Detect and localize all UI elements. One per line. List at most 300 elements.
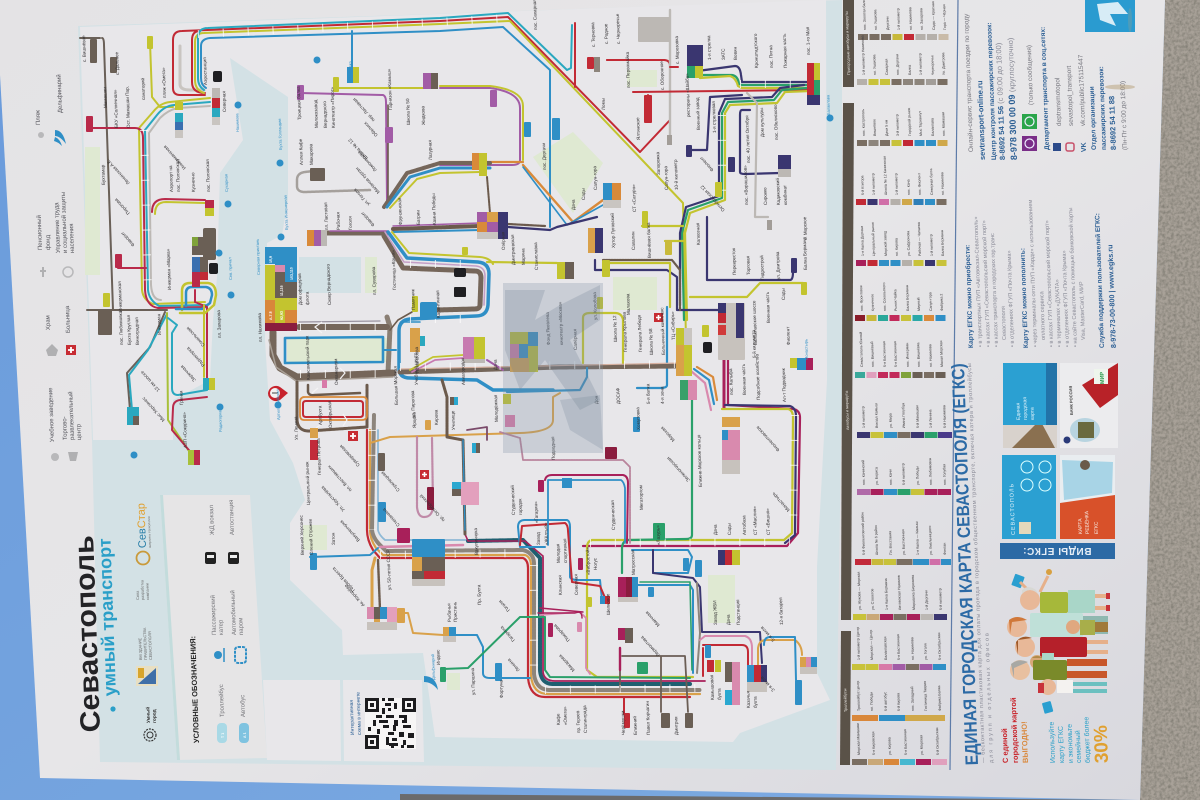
route block: Nakhimov square: 92,93 bbox=[280, 311, 284, 320]
table column 4: Школа № 12 Качинская bbox=[883, 156, 888, 195]
map text: station names south: Завод bbox=[536, 532, 541, 545]
map text: station names east: Дача bbox=[571, 199, 576, 210]
table column 7 bbox=[855, 332, 946, 378]
map text: pier and water names bbox=[217, 60, 831, 680]
legend text: facilities bbox=[35, 74, 83, 442]
how to buy: • в терминалах «ДУКАТА» bbox=[1055, 279, 1063, 347]
table column 4: пос. Фиолент bbox=[917, 173, 922, 195]
legend: bus station: Автостанция bbox=[229, 499, 236, 535]
map text: station names city centre: Станиславка bbox=[533, 242, 539, 270]
table headers bbox=[840, 0, 854, 765]
legend: trolleybus: Т 1 bbox=[221, 733, 225, 738]
how to buy: Карту ЕГКС можно приобрести: bbox=[963, 245, 975, 348]
icon: WhatsApp bbox=[1022, 114, 1037, 129]
map text: station names south: Мегаторгом bbox=[638, 485, 644, 510]
map text: station names south: Матросская bbox=[630, 549, 636, 575]
contacts: пассажирских перевозок: bbox=[1098, 66, 1108, 150]
map text: station names city centre: пл. Суворова bbox=[371, 266, 377, 295]
map text: station names city centre: Артбухта bbox=[317, 405, 323, 425]
map text: station names south: Ул. Хрусталёва bbox=[320, 485, 346, 513]
table column 4: Северная бухта bbox=[929, 168, 934, 195]
route block: Nakhimov square: 10,9 bbox=[269, 256, 273, 263]
map text: station names north side: Кузнечно bbox=[190, 172, 196, 192]
route block: Nakhimov square: 11,116 bbox=[280, 285, 284, 296]
map text: station names east: с. Оборонное bbox=[659, 61, 665, 90]
panel: QR code: Интерактивная bbox=[349, 699, 356, 735]
table column 8: Ивана Голубца bbox=[901, 403, 906, 428]
promo: red: С единой bbox=[1000, 728, 1010, 763]
map text: station names city centre: Генерал Петрова bbox=[316, 438, 322, 475]
card: orange student: РЕБЁНКА bbox=[1083, 510, 1091, 534]
map text: station names south: 5-я балка bbox=[645, 383, 651, 404]
map text: station names south: Фортуна bbox=[498, 679, 504, 698]
table column 5: 1-й километр bbox=[929, 234, 934, 256]
panel: QR code bbox=[343, 680, 424, 762]
map text: station names north side: Малахов курган bbox=[354, 166, 381, 195]
title panel bbox=[68, 495, 267, 760]
map text: station names east: Торговая bbox=[745, 255, 751, 275]
table column 14 bbox=[852, 723, 947, 765]
legend text: facilities: и социальной защиты bbox=[60, 192, 69, 253]
how to buy: • через терминалы сети ПУП «Карди» с использованием bbox=[1028, 199, 1039, 347]
support line: Служба поддержки пользователей ЕГКС: bbox=[1093, 213, 1106, 348]
map text: station names east: Дом культуры bbox=[759, 108, 765, 137]
icon: shopping bbox=[68, 452, 78, 461]
map text: station names city centre: Дмитриевская bbox=[510, 234, 516, 265]
map text: station names south: городок bbox=[517, 498, 523, 515]
map text: station names east: Сапун-гора bbox=[663, 166, 669, 190]
promo: red: ВЫГОДНО! bbox=[1020, 721, 1030, 763]
card: orange student: ЕГКС bbox=[1094, 521, 1100, 534]
map text: station names south: Пристань bbox=[452, 601, 458, 622]
map text: pier and water names: Радиогорка bbox=[217, 410, 223, 432]
map text: station names east: СТ «Сатурн» bbox=[631, 184, 637, 212]
map text: station names east: Военная часть bbox=[765, 291, 771, 323]
contacts: deptransmotopol bbox=[1054, 77, 1063, 126]
legend text: facilities: Больница bbox=[65, 305, 72, 333]
card: blue general bbox=[1003, 363, 1057, 448]
table column 1: Дергачи bbox=[886, 17, 890, 30]
contacts: sevtransport-online.ru bbox=[975, 80, 987, 160]
table column 11: 1-я балка Бермана bbox=[884, 578, 889, 610]
map text: station names city centre: Ломоносова bbox=[414, 346, 420, 373]
map text: station names north side: пл. Ластовая bbox=[323, 202, 329, 230]
card heading: ЕДИНАЯ ГОРОДСКАЯ КАРТА СЕВАСТОПОЛЯ (ЕГКС) bbox=[948, 363, 982, 766]
card: orange student: КАРТА bbox=[1077, 518, 1084, 534]
panel: route tables bbox=[840, 0, 958, 770]
map text: station names south: Верхний Херсонес bbox=[298, 514, 305, 555]
logo: SevStar: СевСтар bbox=[135, 503, 149, 548]
map text: station names city centre: Учебный центр bbox=[412, 352, 419, 385]
table column 10: Школа № 6 район bbox=[874, 525, 879, 555]
legend: bus station bbox=[228, 499, 239, 564]
legend: trolleybus bbox=[217, 684, 227, 743]
logo: department caption bbox=[136, 579, 153, 660]
map text: station names east: Гидрострой bbox=[758, 255, 765, 280]
contacts: 8-978 300 00 09 (круглосуточно) bbox=[1005, 37, 1019, 160]
map text: station names north side: Пирогова bbox=[113, 197, 131, 216]
table column 14: 5-я Бастионная bbox=[903, 729, 908, 755]
legend: car ferry bbox=[229, 590, 246, 663]
table column 5 bbox=[856, 222, 946, 266]
table column 4: 5-й Ктитора bbox=[860, 175, 865, 195]
map text: station names south: пр. Героев bbox=[575, 710, 581, 733]
map text: station names south: Дача bbox=[726, 614, 731, 625]
map text: station names north side: Камни Победы bbox=[431, 193, 437, 225]
map text: station names city centre: Малахова bbox=[625, 293, 631, 315]
map text: station names city centre: Авиагородок bbox=[460, 357, 466, 385]
map text: station names east: Ломы bbox=[601, 98, 606, 110]
table column 8: 5-й Нахимова bbox=[942, 405, 947, 428]
map text: station names north side: Сокольская bbox=[185, 325, 206, 348]
map text: station names south: «Вибростой» bbox=[584, 547, 591, 575]
legend text: facilities: Торгово- bbox=[62, 416, 69, 440]
table column 5: Рабочая — Чапаева bbox=[917, 222, 922, 256]
map base: Artillery bay bbox=[299, 257, 361, 293]
icon: church bbox=[46, 344, 58, 356]
how to buy: • в отделениях ФГУП «Почта Крыма» bbox=[1062, 250, 1071, 347]
table column 11: ул. Жукова — Морская bbox=[857, 572, 862, 610]
how to buy: • в кассах ГУП «Севастопольский морской порт» bbox=[981, 220, 992, 347]
map text: pier and water names: Бухта Инженерная bbox=[283, 195, 289, 230]
table column 14: 5-я Кировская bbox=[871, 731, 876, 755]
table column 13: пл. Победы bbox=[869, 691, 874, 711]
map text: station names south: СТ «Маслин» bbox=[752, 506, 758, 535]
map text: station names east: Кронштадтского bbox=[753, 33, 759, 68]
banner: card types bbox=[1000, 543, 1115, 559]
icon: school bbox=[51, 453, 59, 461]
map base: sea bbox=[78, 0, 842, 770]
legend: trolleybus: Троллейбус bbox=[218, 684, 226, 717]
map text: pier and water names: Бухта Голландия bbox=[277, 118, 283, 150]
table column 5: Балка Бермана bbox=[940, 230, 945, 256]
map text: station names east: 1-я стрелковая bbox=[711, 101, 717, 133]
map base: parks bbox=[85, 70, 735, 690]
map text: station names south: Студенческий bbox=[509, 485, 516, 515]
route badges: south districts bbox=[310, 528, 817, 728]
map text: station names north side: Рабочая bbox=[335, 211, 341, 230]
logo: department caption: разработка bbox=[140, 579, 145, 600]
map text: station names south bbox=[298, 383, 791, 735]
map text: station names south: Индекс bbox=[435, 649, 441, 665]
map text: station names east: пос. 40 летия Октября bbox=[744, 115, 751, 163]
contacts: Центр контроля пассажирских перевозок: bbox=[986, 22, 998, 160]
table column 8: 5-й Мамашаи bbox=[915, 405, 920, 428]
table column 8: Вокзал Камыш bbox=[874, 403, 879, 428]
contacts: Департамент транспорта в соц.сетях: bbox=[1040, 27, 1051, 150]
table column 3: Дачи 5 км bbox=[884, 119, 889, 136]
table column 1 bbox=[858, 0, 948, 40]
map text: station names south: 4-я зона bbox=[659, 386, 665, 404]
map text: station names north side: пос. Полянская bbox=[205, 159, 211, 192]
promo: savings: и экономьте bbox=[1067, 724, 1075, 763]
table column 14: ул. Морская bbox=[919, 735, 924, 755]
map text: station names south: Лермонтова bbox=[639, 635, 661, 658]
icon: pier markers bbox=[130, 56, 834, 690]
legend text: facilities: населения bbox=[69, 223, 76, 253]
map text: station names east: Сады bbox=[581, 188, 586, 200]
logo: department caption: ПРАВИТЕЛЬСТВА bbox=[143, 627, 148, 660]
table column 4: 1-й километр bbox=[894, 173, 899, 195]
map text: station names south: Рыбачья bbox=[446, 603, 452, 622]
panel: unified city card bbox=[948, 0, 1135, 766]
map text: station names north side: пос. Любимовка bbox=[118, 310, 124, 345]
map text: station names south: Дон bbox=[594, 395, 599, 404]
table column 5: Морской завод bbox=[883, 230, 888, 256]
contacts: sevastopol_transport bbox=[1066, 65, 1075, 126]
map text: station names south: пр. Октябрьский bbox=[418, 493, 446, 523]
map text: station names south: Ногус bbox=[593, 557, 598, 570]
support line: 8-978-73-00-800 | www.egks.ru bbox=[1105, 244, 1118, 348]
card: blue Sevastopol: СЕВАСТОПОЛЬ bbox=[1009, 483, 1017, 535]
table column 7: пос. Вишнёвка bbox=[916, 342, 921, 367]
map text: station names north side: Виноградная bbox=[134, 317, 140, 345]
legend: car ferry: Автомобильный bbox=[229, 590, 238, 635]
map text: station names north side: Жидкова bbox=[420, 105, 426, 125]
table column 2: Черноречье bbox=[930, 55, 935, 75]
how to buy: Севастополя bbox=[1001, 306, 1008, 340]
map text: station names east: пос. Пятна bbox=[768, 45, 774, 68]
map text: station names city centre: Фонд Яковлева bbox=[545, 312, 551, 345]
map text: station names north side: Обелиск bbox=[362, 120, 379, 138]
table column 12: Морская — Центр bbox=[869, 630, 874, 660]
map text: station names south: Дача bbox=[713, 524, 718, 535]
legend heading: УСЛОВНЫЕ ОБОЗНАЧЕНИЯ: bbox=[188, 636, 201, 743]
table column 8 bbox=[857, 403, 952, 438]
map text: pier and water names: Сухарная bbox=[223, 174, 229, 192]
map text: pier and water names: Северная пристань bbox=[255, 239, 261, 275]
map text: station names east: Фиолент bbox=[698, 155, 715, 173]
map text: station names east: с. Родное bbox=[603, 23, 609, 44]
promo: savings: карту ЕГКС bbox=[1058, 726, 1066, 763]
legend edge bbox=[160, 495, 180, 760]
table column 3: 3-й километр bbox=[895, 114, 900, 136]
map text: station names east: Запорожка bbox=[655, 151, 661, 175]
map text: station names north side: 13 км шоссе bbox=[139, 370, 161, 393]
table column 14: Морская Мамашаи bbox=[856, 723, 861, 755]
map text: station names south: Сады bbox=[727, 523, 732, 535]
how to buy: оплатного сервиса bbox=[1039, 290, 1047, 340]
map text: station names east: Кадиковский bbox=[774, 178, 781, 205]
map text: pier and water names: Монастырь bbox=[803, 339, 809, 360]
map text: station names city centre: ул. Колобова bbox=[592, 292, 598, 320]
map text: station names south: СТ «Вишня» bbox=[765, 508, 771, 535]
map text: station names north side bbox=[81, 35, 437, 448]
map text: station names south: Казачья bbox=[745, 690, 751, 708]
map text: station names east: пос. Первомайка bbox=[624, 51, 631, 88]
table column 3: Вишнёвое bbox=[872, 119, 877, 136]
map text: station names north side: Бухтамар bbox=[100, 164, 106, 185]
map text: station names north side: Северная bbox=[221, 91, 227, 112]
map text: station names south: Подстанция bbox=[735, 599, 741, 625]
map text: station names south: Олений Отрожек bbox=[307, 518, 314, 555]
legend text: facilities: Управление труда bbox=[54, 202, 62, 253]
map text: station names east: Военный завод bbox=[694, 97, 701, 130]
promo: savings: бюджет более bbox=[1082, 717, 1092, 763]
table column 4: пос. Кача bbox=[906, 179, 911, 195]
table column 13 bbox=[852, 681, 945, 721]
map text: station names city centre: ул. Пирогова bbox=[410, 390, 416, 418]
map base: land bbox=[80, 0, 830, 742]
table column 1: 1-й километр bbox=[896, 8, 901, 30]
table column 10: 5-й Фиолентовский район bbox=[861, 512, 866, 555]
map text: station names city centre: Большая Морская bbox=[393, 365, 399, 405]
table column 2 bbox=[857, 35, 948, 85]
table column 13: Троллейбус центр bbox=[856, 681, 861, 711]
table column 11: ул. Столетов bbox=[870, 588, 875, 610]
map text: station names east: с. Морское bbox=[802, 216, 808, 240]
table column 1: пл. Нахимова bbox=[908, 7, 913, 30]
map text: station names north side: Фаворит bbox=[119, 230, 136, 248]
map text: station names south: Павел Корчагин bbox=[645, 701, 651, 735]
legend text: facilities: Пенсионный bbox=[36, 215, 44, 250]
map text: station names south: Морская bbox=[659, 425, 676, 443]
map text: station names south: Макарова bbox=[558, 653, 576, 673]
map text: station names north side: Мыс Херсонес bbox=[141, 396, 166, 423]
route badges: north side bbox=[86, 36, 438, 465]
map text: station names north side: Школа № 50 bbox=[405, 98, 411, 125]
map text: station names south: Подводная bbox=[550, 436, 556, 460]
table column 6: Фабрика 2 bbox=[939, 294, 944, 311]
map text: station names east bbox=[531, 0, 811, 402]
map text: station names north side: пер. Ластовая bbox=[352, 97, 376, 123]
map text: station names south: Автобаза bbox=[741, 515, 747, 535]
table column 4 bbox=[856, 156, 946, 205]
card description second line: для групп и отдельных офисов bbox=[984, 633, 995, 763]
map text: pier and water names: Балаклава bbox=[825, 94, 831, 115]
table column 1: Гора — Чёрная bbox=[942, 4, 947, 30]
table column 9: ул. Бориса bbox=[874, 467, 879, 485]
table column 13: Фабрика Балка bbox=[937, 685, 942, 711]
table column 12: 5-я Бастионная bbox=[896, 634, 901, 660]
map text: station names north side: Кинотеатр «Пирог» bbox=[330, 87, 336, 128]
map text: station names east: с. Морозовка bbox=[674, 35, 680, 64]
table column 10 bbox=[855, 512, 951, 565]
table column 4: 1-й километр bbox=[871, 173, 876, 195]
glass reflection across the map centre bbox=[503, 283, 603, 453]
title: Севастополь bbox=[68, 535, 106, 733]
table column 2: 1-й километр bbox=[918, 53, 923, 75]
map text: station names south: Кафе bbox=[556, 713, 561, 725]
table column 5: ул. Сафронова bbox=[906, 231, 911, 256]
map text: station names south: Маячная bbox=[644, 610, 661, 628]
map text: station names east: Ал-т Подводник bbox=[781, 367, 787, 402]
map text: pier and water names: Учкуевка bbox=[347, 60, 353, 78]
promo: red bbox=[1000, 697, 1030, 763]
map text: station names south: Стрелецкая bbox=[380, 470, 401, 493]
map text: station names city centre: Генерала Крылова bbox=[622, 311, 628, 352]
table column 6: Балка Бермана bbox=[905, 285, 910, 311]
map text: station names east: Сапун-гора bbox=[592, 166, 598, 190]
how to buy: • в кассах ГУП «Севастопольский морской порт» bbox=[1044, 220, 1055, 347]
card: MIR bank: МИР bbox=[1100, 371, 1106, 384]
contacts: (только сообщения) bbox=[1025, 45, 1035, 105]
routes: central bundles bbox=[269, 163, 802, 714]
map text: station names south: Вакуленчука bbox=[339, 519, 361, 543]
map text: station names south: пл. Восставших bbox=[326, 464, 353, 493]
map text: pier and water names: Дельфинарий bbox=[430, 654, 436, 680]
icon: hospital bbox=[66, 345, 76, 355]
how to buy: Visa, MasterCard, МИР bbox=[1079, 281, 1087, 340]
table column 12: 1-й километр Центр bbox=[856, 627, 861, 660]
map text: station names city centre: Центральный рынок bbox=[303, 461, 311, 505]
map text: pier and water names: Артиллерийская bbox=[275, 389, 281, 420]
photo background: dark strip below poster bbox=[400, 794, 1140, 800]
table column 10: ул. Бастионная bbox=[901, 529, 906, 555]
table column 2: Балка bbox=[908, 65, 912, 75]
table column 7: пос. Инкерман bbox=[905, 343, 910, 367]
icon: pension bbox=[40, 267, 46, 277]
map text: station names city centre: пл. Нахимова bbox=[257, 312, 263, 342]
legend: passenger boat: катер bbox=[218, 619, 225, 635]
map text: station names north side: Школа № 12 bbox=[347, 137, 369, 161]
logo: department caption: СЕВАСТОПОЛЯ bbox=[148, 631, 153, 660]
map text: station names south: 12-я батарея bbox=[778, 597, 784, 625]
table header labels: Автобусы и маршруты bbox=[845, 390, 850, 430]
map text: station names north side: Инкерман bbox=[156, 313, 162, 335]
map text: station names north side: Инкерманская bbox=[117, 281, 123, 312]
promo: red: городской картой bbox=[1009, 697, 1020, 763]
table column 2: 1-й километр Нахимова bbox=[861, 35, 866, 75]
map text: station names south: Суворовская bbox=[338, 444, 361, 468]
route badges: city centre bbox=[310, 90, 621, 522]
contacts: Отдел организации bbox=[1089, 86, 1098, 150]
map text: station names east: Сахалин bbox=[630, 231, 636, 250]
map text: pier and water names: Нахимова bbox=[234, 113, 240, 132]
map text: station names south: Хомутовка bbox=[635, 407, 641, 430]
route block: Nakhimov square: 103,110 bbox=[290, 267, 294, 280]
promo: savings: Используйте bbox=[1048, 721, 1057, 763]
map text: station names east: пос. Кальфа bbox=[728, 368, 734, 395]
map text: station names south: Гоголя bbox=[497, 599, 511, 613]
map text: station names city centre: Памятник bbox=[410, 288, 416, 310]
map text: station names south: Зеленогорская bbox=[666, 455, 691, 483]
table column 12: пл. Нахимова bbox=[910, 637, 915, 660]
icon: beach bbox=[38, 132, 44, 138]
how to buy: • в кассах транспорта и городских гор.транс bbox=[990, 233, 1000, 347]
map text: station names south: Пожарова bbox=[552, 623, 571, 643]
map text: station names north side: Заречная bbox=[179, 364, 197, 383]
map text: station names south: Сталинграда bbox=[582, 705, 588, 733]
map text: pier and water names: Сев. причал bbox=[227, 257, 233, 280]
map text: station names south: Вакулинчука bbox=[473, 528, 479, 555]
table column 7: пос. Вишнёвый bbox=[870, 341, 875, 367]
logo: smart city bbox=[144, 707, 158, 741]
map text: station names north side: Инкерман «Марка» bbox=[166, 248, 172, 290]
map text: station names east: Подсобное хозяйство bbox=[753, 353, 761, 400]
card description: — бесконтактная пластиковая карта для оплаты проезда в городском общественном транспорте, включая катера и троллейбусы bbox=[966, 363, 987, 763]
map text: station names city centre: Дача bbox=[493, 359, 498, 370]
map text: station names city centre: Кирова bbox=[433, 409, 439, 425]
legend text: facilities: фонд bbox=[45, 234, 52, 250]
table column 6: Рынок Чайка bbox=[893, 289, 898, 311]
table column 9: пос. Качи bbox=[888, 469, 893, 485]
map text: station names east: рестораны «Шайба» bbox=[683, 73, 691, 117]
map text: station names north side: Гарнизон «Камыш» bbox=[387, 68, 393, 110]
table column 8: ул. Мира bbox=[888, 413, 893, 428]
logo: smart city: Умный bbox=[144, 707, 152, 723]
map text: station names east: Колхозная bbox=[695, 222, 701, 245]
contacts: (Пн-Пт с 9:00 до 18:00) bbox=[1120, 81, 1129, 150]
table column 1: пл. Ушакова bbox=[873, 9, 878, 30]
map text: station names east: пос. «Ворошилов» bbox=[743, 165, 749, 205]
map text: station names north side: пляж «Омега» bbox=[161, 67, 167, 98]
map text: station names east: Балаклавское шоссе bbox=[751, 300, 758, 345]
map text: station names south: Героев Бреста bbox=[331, 566, 356, 593]
table column 5: 1-я балка Дергачи bbox=[860, 226, 865, 256]
card: orange student bbox=[1060, 455, 1115, 539]
table column 3: Мыс Тарханкут bbox=[918, 110, 923, 136]
